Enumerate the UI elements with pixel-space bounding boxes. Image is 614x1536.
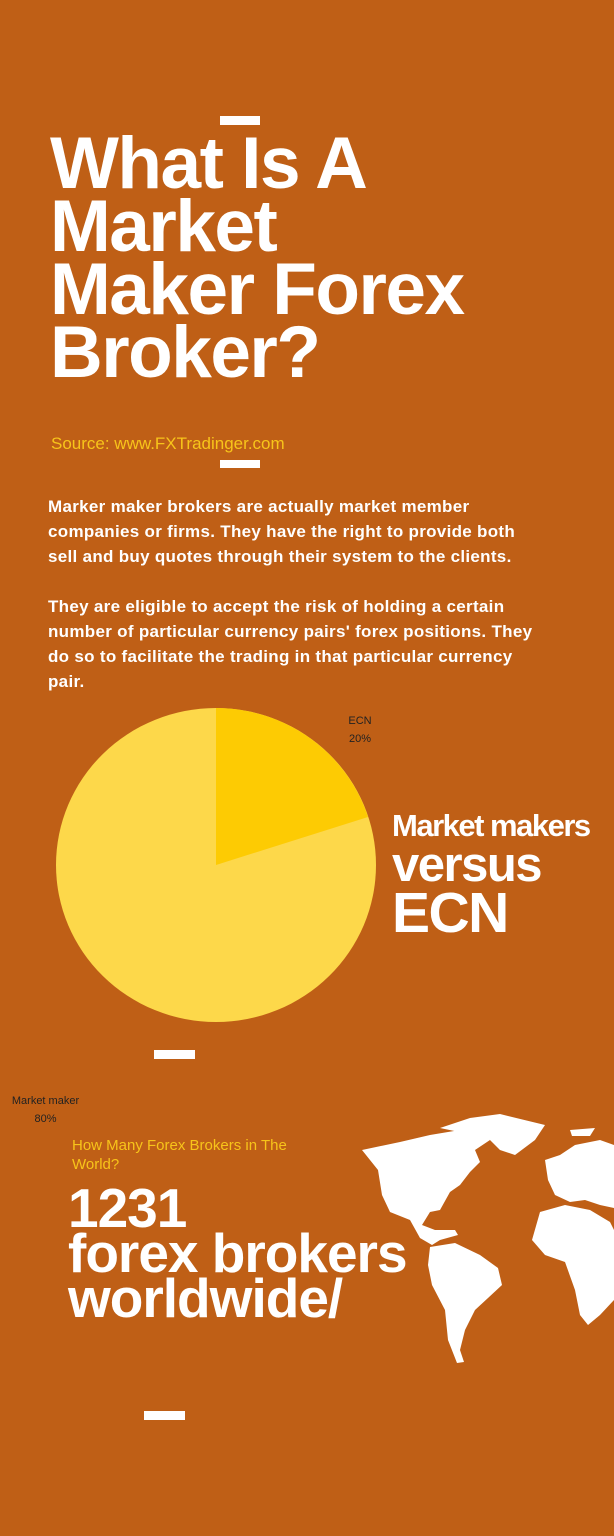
label: ECN: 20%	[349, 733, 371, 745]
title: Maker Forex	[50, 249, 464, 330]
label: Market maker: Market maker	[12, 1095, 79, 1107]
big number: 1231	[68, 1177, 186, 1239]
title: Broker?	[50, 312, 319, 393]
pie chart	[56, 708, 376, 1022]
big number: forex brokers	[68, 1222, 407, 1284]
label: ECN: ECN	[348, 715, 372, 727]
title: Market	[50, 186, 276, 267]
decorative bar top	[220, 116, 260, 125]
pie heading: versus	[392, 838, 541, 892]
label: Market maker	[12, 1095, 79, 1125]
title: What Is A	[50, 123, 366, 204]
decorative bar	[220, 460, 260, 468]
question text: How Many Forex Brokers in The World?	[72, 1137, 287, 1173]
source text: Source: www.FXTradinger.com	[51, 434, 285, 453]
intro text: Marker maker brokers are actually market member companies or firms. They have the right to provide both sell and buy quotes through their system to the clients.	[48, 497, 515, 566]
pie heading: Market makers	[392, 808, 590, 843]
pie heading	[392, 808, 590, 945]
big number	[68, 1177, 407, 1329]
decorative bar bottom	[144, 1411, 185, 1420]
label: ECN	[348, 715, 372, 745]
intro text	[48, 497, 532, 691]
world map	[362, 1114, 614, 1363]
title	[50, 123, 464, 393]
intro text: They are eligible to accept the risk of holding a certain number of particular currency pairs' forex positions. They do so to facilitate the trading in that particular currency pair.	[48, 597, 532, 691]
decorative bar	[154, 1050, 195, 1059]
pie heading: ECN	[392, 881, 508, 945]
label: Market maker: 80%	[34, 1113, 57, 1125]
big number: worldwide/	[68, 1267, 342, 1329]
